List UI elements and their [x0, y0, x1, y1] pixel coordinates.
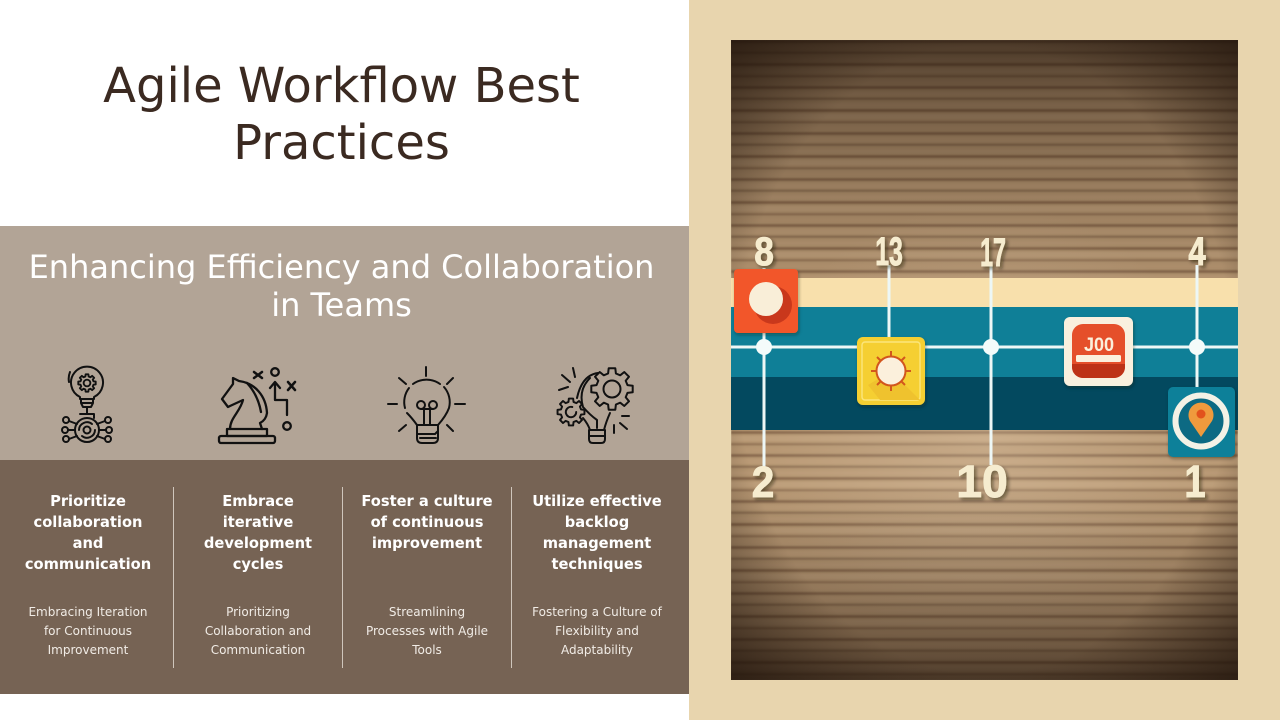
- timeline numbers: 2: [752, 457, 774, 506]
- icon: chess knight with strategy arrow: [218, 367, 296, 444]
- timeline numbers: 13: [875, 230, 903, 275]
- practice 2 description: Communication: [211, 643, 305, 657]
- practice 1 heading: and: [73, 535, 103, 552]
- timeline numbers: 17: [980, 229, 1006, 275]
- horizontal colour bands: [731, 278, 1238, 430]
- practice 4 description: Fostering a Culture of: [532, 605, 662, 619]
- icon: bulb with gear and circuit network: [61, 366, 113, 443]
- subtitle: [29, 248, 654, 324]
- practice 2 description: [205, 605, 311, 657]
- practice 4 description: Flexibility and: [555, 624, 639, 638]
- practice 1 description: [28, 605, 148, 657]
- practice 1 heading: communication: [25, 556, 151, 573]
- practice 1 description: for Continuous: [44, 624, 132, 638]
- icon: cream card with red badge: [1064, 317, 1133, 386]
- panel: subtitle and icons band: [0, 226, 689, 460]
- timeline board illustration: [731, 40, 1238, 680]
- practice 2 heading: development: [204, 535, 312, 552]
- practice 3 description: [366, 605, 488, 657]
- panel: right beige background: [689, 0, 1280, 720]
- icon: yellow sun card: [857, 337, 925, 405]
- practice 1 heading: [25, 493, 151, 573]
- practice 4 heading: management: [543, 535, 651, 552]
- practice 4 heading: Utilize effective: [532, 493, 662, 510]
- timeline numbers: 8: [754, 229, 774, 273]
- icon: cream card with red badge: J00: [1084, 334, 1114, 355]
- practice 3 heading: of continuous: [371, 514, 483, 531]
- icon: light bulb: [387, 366, 466, 444]
- icon: teal location pin card: [1168, 387, 1235, 457]
- subtitle: in Teams: [271, 286, 412, 324]
- practice 4 description: Adaptability: [561, 643, 633, 657]
- icon: orange card with circle: [734, 269, 798, 333]
- icon: head bulb with gears: [556, 367, 634, 444]
- practice 4 heading: [532, 493, 662, 573]
- wood background: [731, 40, 1238, 680]
- timeline numbers: 1: [1184, 456, 1206, 507]
- practice 2 heading: Embrace: [222, 493, 294, 510]
- practice 2 description: Collaboration and: [205, 624, 311, 638]
- divider 2: [342, 487, 343, 668]
- practice 2 heading: iterative: [223, 514, 293, 531]
- practice 3 heading: improvement: [372, 535, 482, 552]
- practice 3 description: Streamlining: [389, 605, 465, 619]
- title: [103, 58, 580, 171]
- practice 3 description: Tools: [412, 643, 442, 657]
- timeline numbers: 4: [1188, 229, 1206, 274]
- practice 4 heading: techniques: [551, 556, 643, 573]
- practice 3 heading: [361, 493, 493, 552]
- divider 1: [173, 487, 174, 668]
- panel: title area: [0, 0, 689, 226]
- practice 4 heading: backlog: [565, 514, 629, 531]
- practice 1 description: Embracing Iteration: [28, 605, 148, 619]
- timeline numbers: 10: [956, 457, 1008, 507]
- title: Practices: [233, 115, 450, 171]
- practice 1 heading: collaboration: [34, 514, 142, 531]
- panel: practices band: [0, 460, 689, 694]
- practice 2 heading: cycles: [233, 556, 283, 573]
- timeline lines and nodes: [731, 265, 1238, 470]
- divider 3: [511, 487, 512, 668]
- practice 1 description: Improvement: [48, 643, 128, 657]
- timeline numbers: [752, 229, 1206, 507]
- practice 3 heading: Foster a culture: [361, 493, 493, 510]
- practice 3 description: Processes with Agile: [366, 624, 488, 638]
- title: Agile Workflow Best: [103, 58, 580, 114]
- practice 1 heading: Prioritize: [50, 493, 126, 510]
- subtitle: Enhancing Efficiency and Collaboration: [29, 248, 654, 286]
- practice 4 description: [532, 605, 662, 657]
- practice 2 heading: [204, 493, 312, 573]
- practice 2 description: Prioritizing: [226, 605, 290, 619]
